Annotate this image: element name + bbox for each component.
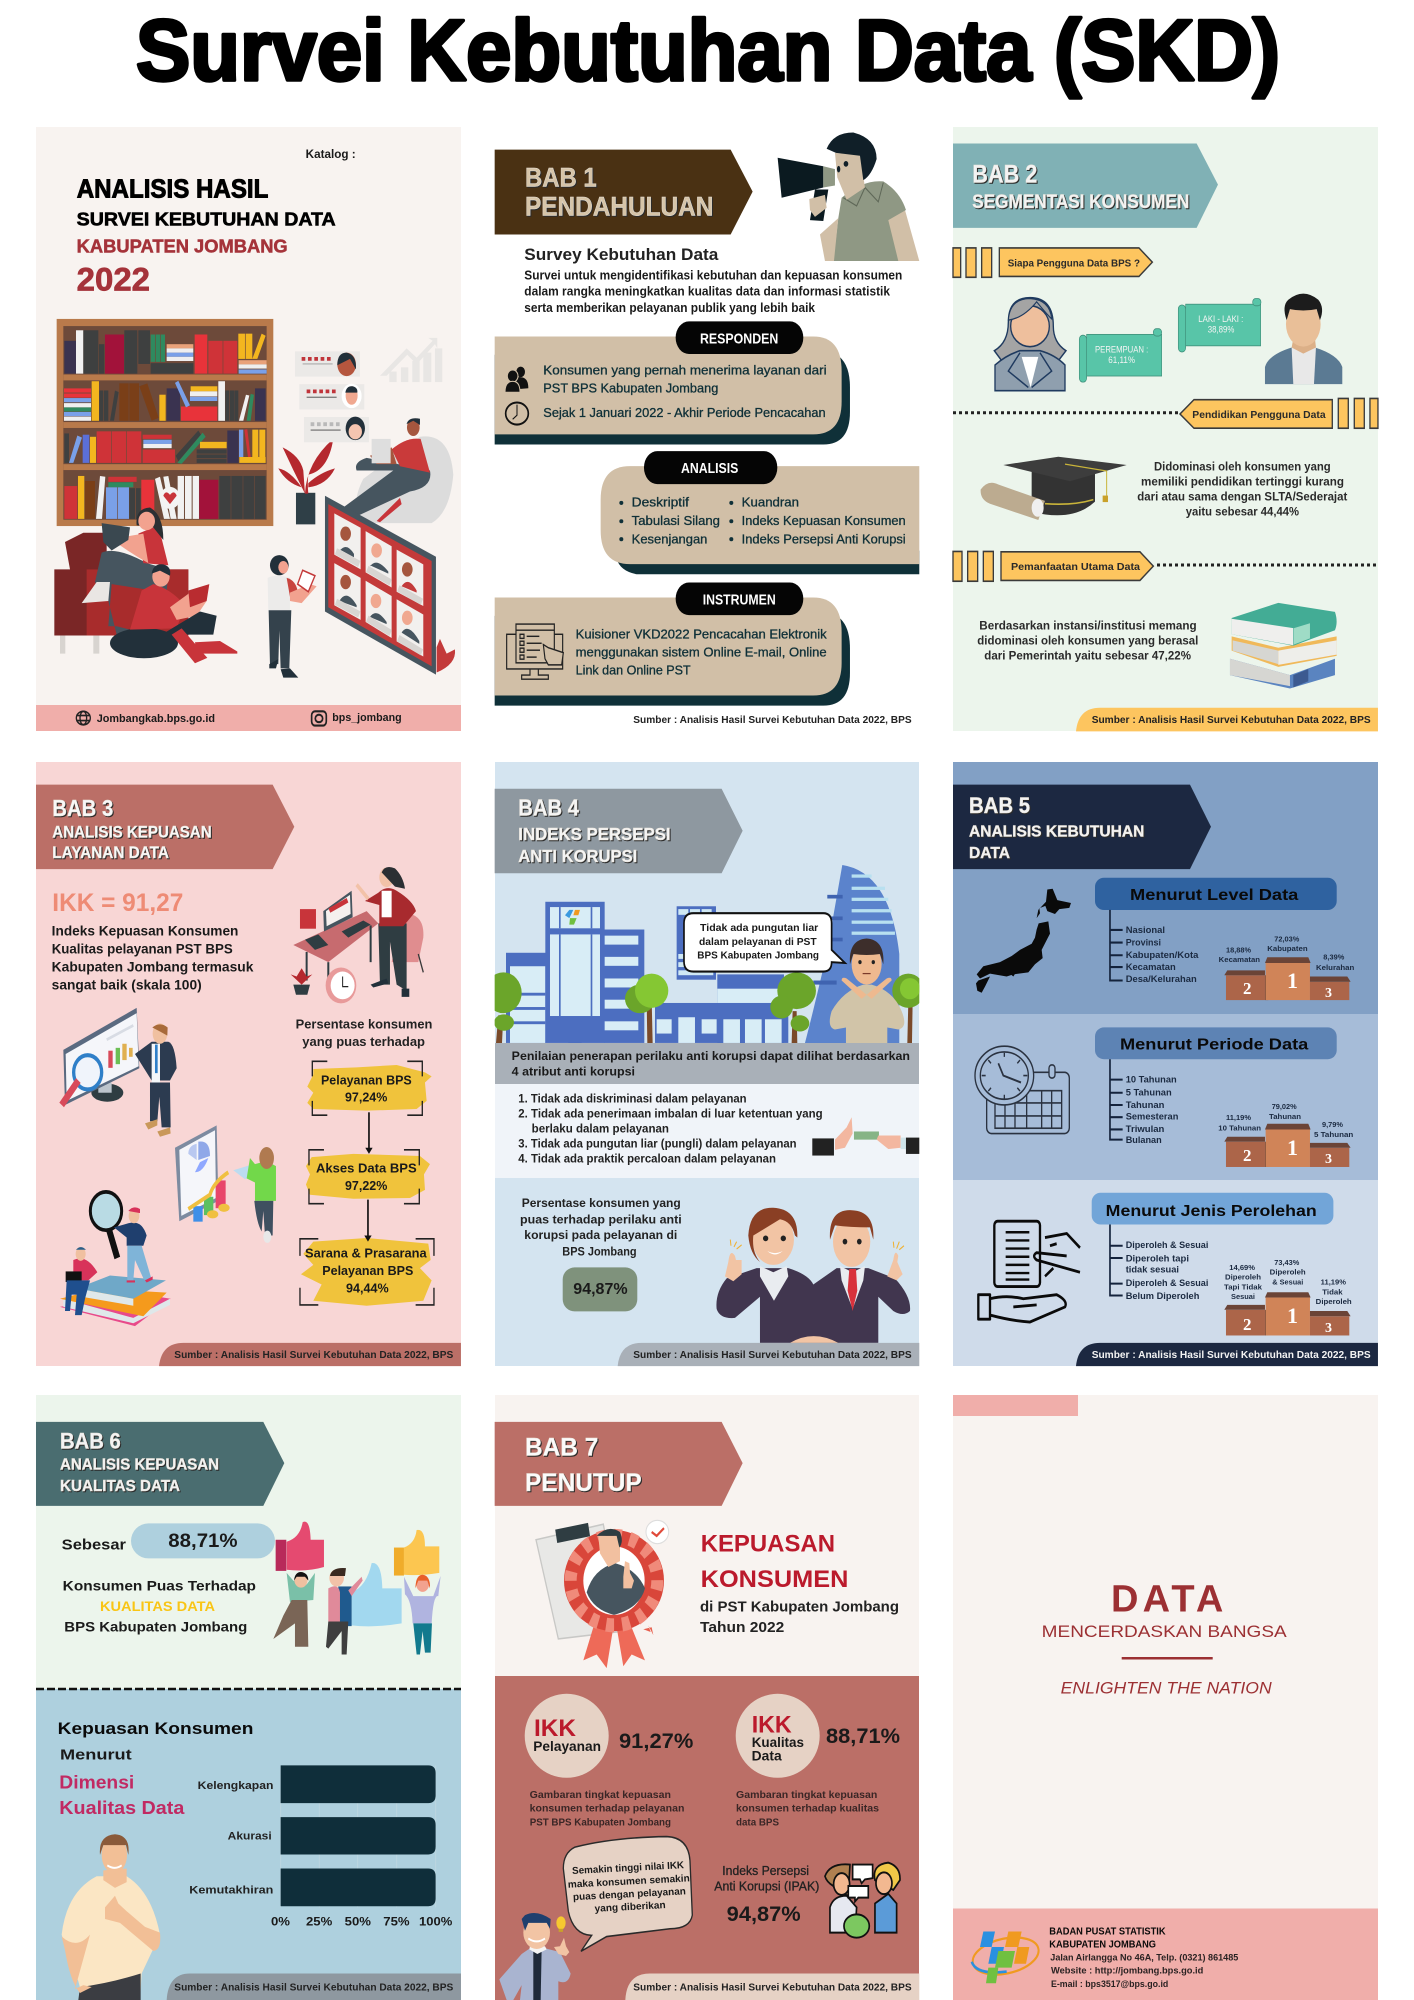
- footer text: instagram: bps_jombang: [332, 712, 402, 724]
- footer band: contact: [953, 1908, 1378, 2000]
- chart: kepuasan by data quality dimension: 75%: [383, 1916, 410, 1928]
- chart: periode data podium: 10 Tahunan: [1218, 1123, 1261, 1132]
- chart: jenis perolehan podium: Diperoleh: [1316, 1297, 1352, 1306]
- step: sarana dan prasarana: 94,44%: [346, 1282, 389, 1296]
- band: anti corruption attributes: 1. Tidak ada diskriminasi dalam pelayanan: [518, 1094, 747, 1106]
- stat: IPAK: [714, 1864, 819, 1926]
- step: sarana dan prasarana: [305, 1247, 428, 1296]
- heading: kepuasan konsumen: [58, 1719, 253, 1818]
- illustration: people holding thumbs up: [273, 1522, 441, 1655]
- banner: BAB 5: [953, 785, 1211, 869]
- section: menurut level data: Nasional: [1126, 925, 1165, 936]
- heading: kepuasan konsumen: KEPUASAN: [701, 1530, 835, 1557]
- section: menurut level data: Kabupaten/Kota: [1126, 950, 1199, 961]
- section: menurut level data: Desa/Kelurahan: [1126, 974, 1197, 985]
- banner: BAB 7: PENUTUP: [525, 1469, 642, 1497]
- chart: jenis perolehan podium: 11,19%: [1321, 1278, 1346, 1286]
- icon: BPS logo: [970, 1931, 1041, 1983]
- card: analisis: ANALISIS: [681, 460, 738, 477]
- callout: perempuan share: 61,11%: [1108, 355, 1135, 365]
- chart: level data podium: [1219, 934, 1355, 1001]
- text: pendidikan finding: [1137, 461, 1347, 519]
- banner: BAB 2: SEGMENTASI KONSUMEN: [972, 192, 1189, 213]
- callout: speech bubble: Tidak ada pungutan liar: [700, 923, 818, 934]
- card: instrumen: menggunakan sistem Online E-mail, Online: [576, 645, 827, 659]
- text: pemanfaatan finding: Berdasarkan instansi/institusi memang: [979, 620, 1197, 632]
- chart: periode data podium: 9,79%: [1322, 1120, 1343, 1129]
- text: contact details: KABUPATEN JOMBANG: [1049, 1939, 1156, 1950]
- callout: perempuan share: PEREMPUAN :: [1095, 344, 1148, 354]
- panel: BAB 1 pendahuluan: [495, 132, 919, 726]
- chart: jenis perolehan podium: 3: [1325, 1321, 1332, 1336]
- icon: globe: [76, 711, 90, 725]
- chart: level data podium: 3: [1325, 986, 1332, 1001]
- heading: cover title: KABUPATEN JOMBANG: [77, 236, 288, 256]
- illustration: growth chart icon: [380, 338, 442, 382]
- chart: periode data podium: 11,19%: [1226, 1113, 1251, 1122]
- chart: kepuasan by data quality dimension: 0%: [271, 1916, 290, 1928]
- card: responden: Sejak 1 Januari 2022 - Akhir Periode Pencacahan: [543, 406, 826, 420]
- section: menurut level data: Kecamatan: [1126, 962, 1176, 973]
- stat: 88,71%: [62, 1523, 275, 1558]
- chart: level data podium: 72,03%: [1274, 934, 1300, 943]
- text: survey description: Survey Kebutuhan Data: [524, 245, 719, 264]
- text: konsumen puas: Konsumen Puas Terhadap: [63, 1577, 256, 1593]
- stat: 94,87% pill: 94,87%: [573, 1281, 628, 1298]
- step: pelayanan BPS: Pelayanan BPS: [321, 1074, 412, 1088]
- panel: closing: [953, 1395, 1378, 2000]
- text: pelayanan description: konsumen terhadap pelayanan: [530, 1803, 684, 1815]
- source note: [167, 1974, 461, 2000]
- step: pelayanan BPS: 97,24%: [345, 1091, 387, 1105]
- source note: [1076, 708, 1378, 731]
- chart: level data podium: Kecamatan: [1219, 955, 1260, 964]
- illustration: magnifier and books: [60, 1192, 171, 1326]
- section: menurut periode data: Tahunan: [1126, 1100, 1165, 1111]
- text: persentase heading: Persentase konsumen: [296, 1018, 432, 1032]
- banner: BAB 7: [495, 1422, 743, 1506]
- illustration: trees: [485, 972, 924, 1045]
- tag: pemanfaatan utama: [953, 551, 1378, 581]
- callout: laki-laki share: [1178, 298, 1261, 352]
- heading: data mencerdaskan bangsa: DATA: [1111, 1579, 1223, 1621]
- card: instrumen: Kuisioner VKD2022 Pencacahan Elektronik: [576, 627, 827, 641]
- stat: IKK kualitas data: IKK: [752, 1711, 792, 1738]
- panel: BAB 6 analisis kepuasan kualitas: [36, 1395, 461, 2000]
- banner: BAB 5: BAB 5: [969, 793, 1030, 818]
- text: IKK explanation: sangat baik (skala 100): [52, 978, 202, 992]
- text: pendidikan finding: Didominasi oleh konsumen yang: [1154, 461, 1331, 473]
- section: menurut jenis perolehan: Diperoleh tapi: [1126, 1254, 1189, 1265]
- text: contact details: [1049, 1927, 1239, 1990]
- chart: kepuasan by data quality dimension: 50%: [345, 1916, 371, 1928]
- section: menurut jenis perolehan: [1092, 1193, 1333, 1302]
- chart: jenis perolehan podium: Diperoleh: [1225, 1273, 1261, 1282]
- text: pendidikan finding: memiliki pendidikan tertinggi kurang: [1141, 476, 1344, 488]
- heading: data mencerdaskan bangsa: [1042, 1579, 1287, 1697]
- tag: pendidikan pengguna: [953, 398, 1378, 428]
- illustration: man thumbs up: [62, 1834, 160, 2000]
- tag: siapa pengguna: [953, 248, 1152, 277]
- source note: Sumber : Analisis Hasil Survei Kebutuhan Data 2022, BPS: [633, 1982, 912, 1994]
- card: analisis: Kesenjangan: [632, 532, 707, 546]
- text: kualitas description: [736, 1789, 879, 1828]
- text: kualitas description: Gambaran tingkat kepuasan: [736, 1789, 877, 1801]
- flow shapes: [300, 1061, 434, 1306]
- chart: kepuasan by data quality dimension: Kemutakhiran: [189, 1884, 274, 1896]
- banner: BAB 5: DATA: [969, 845, 1010, 862]
- banner: BAB 2: [953, 143, 1218, 228]
- chart: level data podium: 18,88%: [1226, 945, 1251, 954]
- callout: speech bubble: Semakin tinggi nilai IKK: [572, 1860, 685, 1877]
- banner: BAB 3: [36, 785, 294, 869]
- band: anti corruption attributes: 4. Tidak ada praktik percaloan dalam pelayanan: [518, 1154, 776, 1166]
- chart: jenis perolehan podium: Tapi Tidak: [1224, 1282, 1263, 1291]
- card: analisis: Deskriptif: [632, 496, 690, 510]
- icon: map silhouette: [976, 889, 1071, 993]
- source note: Sumber : Analisis Hasil Survei Kebutuhan Data 2022, BPS: [1092, 1349, 1371, 1361]
- text: pendidikan finding: dari atau sama dengan SLTA/Sederajat: [1137, 492, 1347, 504]
- text: pendidikan finding: yaitu sebesar 44,44%: [1186, 507, 1299, 519]
- text: contact details: E-mail : bps3517@bps.go.id: [1051, 1979, 1168, 1990]
- panel: BAB 5 analisis kebutuhan data: [953, 762, 1378, 1366]
- icon: two men exchanging money: [825, 1863, 900, 1938]
- chart: jenis perolehan podium: 73,43%: [1274, 1258, 1300, 1267]
- section: menurut jenis perolehan: Menurut Jenis Perolehan: [1106, 1203, 1317, 1220]
- chart: level data podium: Kelurahan: [1316, 963, 1355, 972]
- footer text: website: Jombangkab.bps.go.id: [97, 713, 215, 725]
- text: survey description: [524, 245, 902, 315]
- chart: kepuasan by data quality dimension: [189, 1765, 452, 1928]
- heading: kepuasan konsumen: Kualitas Data: [59, 1798, 185, 1818]
- text: pemanfaatan finding: dari Pemerintah yaitu sebesar 47,22%: [984, 651, 1191, 663]
- heading: cover title: 2022: [77, 262, 150, 298]
- callout: perempuan share: [1079, 329, 1162, 382]
- callout: speech bubble: BPS Kabupaten Jombang: [697, 950, 819, 962]
- illustration: city buildings with BPS office: [506, 865, 899, 1044]
- heading: kepuasan konsumen: Dimensi: [59, 1773, 134, 1793]
- panel: BAB 3 analisis kepuasan layanan: [36, 762, 461, 1366]
- text: survey description: serta memberikan pelayanan publik yang lebih baik: [524, 301, 815, 315]
- text: survey description: Survei untuk mengidentifikasi kebutuhan dan kepuasan konsumen: [524, 268, 902, 282]
- banner: BAB 7: BAB 7: [525, 1433, 598, 1461]
- band: assessment intro: [495, 1043, 919, 1084]
- band: assessment intro: Penilaian penerapan perilaku anti korupsi dapat dilihat berdasarkan: [512, 1049, 910, 1063]
- panel: BAB 7 penutup: [495, 1395, 919, 2000]
- chart: periode data podium: 2: [1243, 1146, 1252, 1165]
- source note: Sumber : Analisis Hasil Survei Kebutuhan Data 2022, BPS: [1092, 714, 1371, 726]
- text: contact details: BADAN PUSAT STATISTIK: [1049, 1927, 1166, 1938]
- card: analisis: Kuandran: [742, 496, 799, 510]
- text: percentage anti corruption: korupsi pada pelayanan di: [524, 1228, 677, 1242]
- text: percentage anti corruption: puas terhadap perilaku anti: [520, 1212, 682, 1226]
- text: kualitas description: konsumen terhadap kualitas: [736, 1803, 879, 1815]
- card: analisis: Indeks Kepuasan Konsumen: [742, 514, 906, 528]
- chart: kepuasan by data quality dimension: 25%: [306, 1916, 332, 1928]
- chart: jenis perolehan podium: Diperoleh: [1270, 1268, 1306, 1277]
- illustration: person on beanbag with board: [325, 418, 455, 675]
- panel: BAB 2 segmentasi konsumen: [953, 127, 1378, 731]
- illustration: two business people thumbs up: [716, 1208, 910, 1343]
- card: responden: [495, 321, 850, 445]
- heading: cover title: [77, 174, 336, 298]
- chart: jenis perolehan podium: 14,69%: [1229, 1263, 1255, 1272]
- chart: level data podium: 8,39%: [1323, 953, 1345, 962]
- stat: IKK pelayanan: IKK: [534, 1715, 577, 1742]
- text: IKK explanation: Kabupaten Jombang termasuk: [52, 960, 254, 974]
- illustration: readers on sofa: [54, 508, 237, 663]
- illustration: man with idea: [499, 1913, 571, 2000]
- source note: Sumber : Analisis Hasil Survei Kebutuhan Data 2022, BPS: [174, 1982, 453, 1994]
- illustration: graduation cap and diploma: [981, 457, 1127, 520]
- text: pelayanan description: [530, 1789, 684, 1828]
- panel: BAB 4 indeks persepsi anti korupsi: [485, 762, 924, 1366]
- heading: kepuasan konsumen: [700, 1530, 899, 1636]
- illustration: stack of books: [1230, 603, 1337, 689]
- source note: Sumber : Analisis Hasil Survei Kebutuhan Data 2022, BPS: [633, 1349, 912, 1361]
- banner: BAB 2: BAB 2: [972, 161, 1037, 189]
- icon: document and hands: [978, 1221, 1080, 1322]
- source note: [1076, 1343, 1378, 1366]
- step: akses data BPS: 97,22%: [345, 1179, 387, 1193]
- chart: jenis perolehan podium: [1224, 1258, 1352, 1336]
- section: menurut periode data: Triwulan: [1126, 1124, 1165, 1135]
- text: konsumen puas: [63, 1577, 256, 1635]
- illustration: man icon: [1265, 294, 1342, 384]
- step: akses data BPS: Akses Data BPS: [316, 1161, 417, 1176]
- source note: [618, 1343, 919, 1366]
- icon: clock and calendar: [975, 1046, 1069, 1134]
- panel: cover: [36, 127, 461, 731]
- banner: BAB 6: ANALISIS KEPUASAN: [60, 1457, 219, 1474]
- step: pelayanan BPS: [321, 1074, 412, 1105]
- stat: 88,71%: 88,71%: [168, 1531, 238, 1552]
- text: catalog label: Katalog :: [306, 149, 356, 161]
- chart: jenis perolehan podium: 1: [1287, 1303, 1298, 1328]
- step: akses data BPS: [316, 1161, 417, 1193]
- source note: [625, 1974, 919, 2000]
- stat: IKK pelayanan: [525, 1694, 694, 1778]
- source note: Sumber : Analisis Hasil Survei Kebutuhan Data 2022, BPS: [174, 1349, 453, 1361]
- illustration: woman icon: [994, 298, 1066, 391]
- heading: data mencerdaskan bangsa: MENCERDASKAN BANGSA: [1042, 1622, 1287, 1641]
- banner: BAB 4: ANTI KORUPSI: [518, 846, 637, 866]
- stat: IKK kualitas data: Kualitas: [752, 1735, 804, 1750]
- step: sarana dan prasarana: Sarana & Prasarana: [305, 1247, 428, 1261]
- banner: BAB 3: ANALISIS KEPUASAN: [52, 824, 212, 842]
- illustration: man crossing arms: [830, 938, 904, 1045]
- tag: siapa pengguna: Siapa Pengguna Data BPS ?: [1008, 257, 1140, 269]
- chart: kepuasan by data quality dimension: Kelengkapan: [198, 1780, 274, 1792]
- text: IKK explanation: Indeks Kepuasan Konsumen: [52, 924, 238, 939]
- callout: speech bubble: dalam pelayanan di PST: [699, 937, 817, 948]
- banner: BAB 1: BAB 1: [525, 163, 597, 193]
- callout: speech bubble: [684, 913, 845, 972]
- banner: BAB 6: KUALITAS DATA: [60, 1478, 180, 1495]
- chart: level data podium: Kabupaten: [1267, 944, 1308, 953]
- callout: speech bubble: yang diberikan: [594, 1900, 666, 1915]
- text: contact details: Jalan Airlangga No 46A, Telp. (0321) 861485: [1050, 1952, 1239, 1963]
- illustration: plant: [278, 439, 335, 524]
- chart: level data podium: 1: [1287, 968, 1298, 993]
- illustration: woman at desk: [291, 867, 423, 1003]
- card: analisis: Tabulasi Silang: [632, 514, 720, 528]
- text: kualitas description: data BPS: [736, 1816, 779, 1828]
- text: pemanfaatan finding: [977, 620, 1198, 663]
- text: pelayanan description: Gambaran tingkat kepuasan: [530, 1789, 671, 1801]
- callout: speech bubble: puas dengan pelayanan: [573, 1886, 686, 1903]
- section: menurut periode data: Menurut Periode Data: [1120, 1036, 1308, 1054]
- text: pemanfaatan finding: didominasi oleh konsumen yang berasal: [977, 636, 1198, 648]
- card: instrumen: Link dan Online PST: [576, 663, 691, 677]
- section: menurut periode data: Bulanan: [1126, 1135, 1162, 1146]
- callout: laki-laki share: 38,89%: [1208, 324, 1234, 334]
- band: anti corruption attributes: [495, 1084, 919, 1178]
- text: pelayanan description: PST BPS Kabupaten Jombang: [530, 1816, 671, 1828]
- card: instrumen: INSTRUMEN: [703, 592, 776, 608]
- heading: kepuasan konsumen: KONSUMEN: [701, 1566, 848, 1593]
- text: percentage anti corruption: BPS Jombang: [562, 1244, 637, 1258]
- card: analisis: [601, 451, 919, 574]
- text: konsumen puas: KUALITAS DATA: [100, 1598, 215, 1614]
- chart: periode data podium: [1218, 1102, 1354, 1167]
- section: menurut level data: Provinsi: [1126, 937, 1161, 948]
- stat: IKK pelayanan: Pelayanan: [533, 1739, 601, 1754]
- stat: IKK kualitas data: [736, 1694, 900, 1778]
- banner: BAB 4: INDEKS PERSEPSI: [518, 824, 671, 844]
- banner: BAB 3: LAYANAN DATA: [52, 844, 169, 862]
- card: responden: PST BPS Kabupaten Jombang: [543, 382, 718, 396]
- illustration: standing man with clipboard: [268, 555, 317, 678]
- heading: kepuasan konsumen: Menurut: [60, 1747, 132, 1764]
- illustration: refusing money: [812, 1117, 919, 1156]
- banner: BAB 4: [495, 789, 743, 873]
- icon: instagram: [312, 711, 326, 726]
- chart: kepuasan by data quality dimension: Akurasi: [228, 1830, 272, 1842]
- stat: IPAK: 94,87%: [727, 1903, 801, 1926]
- text: percentage anti corruption: [520, 1196, 682, 1258]
- chart: periode data podium: 79,02%: [1272, 1102, 1297, 1111]
- stat: 94,87% pill: [563, 1267, 637, 1311]
- band: anti corruption attributes: 2. Tidak ada penerimaan imbalan di luar ketentuan yang: [518, 1109, 823, 1121]
- chart: jenis perolehan podium: 2: [1243, 1315, 1252, 1334]
- heading: kepuasan konsumen: Tahun 2022: [700, 1619, 784, 1636]
- chart: jenis perolehan podium: Tidak: [1322, 1287, 1343, 1296]
- flow: satisfaction steps: [300, 1061, 434, 1306]
- banner: BAB 5: ANALISIS KEBUTUHAN: [969, 824, 1144, 840]
- chart: periode data podium: 1: [1287, 1135, 1298, 1160]
- band: assessment intro: 4 atribut anti korupsi: [512, 1065, 635, 1079]
- heading: kepuasan konsumen: di PST Kabupaten Jombang: [700, 1599, 899, 1616]
- banner: BAB 6: [36, 1422, 284, 1506]
- banner: BAB 1: PENDAHULUAN: [525, 191, 713, 221]
- chart: periode data podium: 5 Tahunan: [1314, 1130, 1354, 1139]
- illustration: rosette with man: [536, 1520, 669, 1668]
- illustration: tablet with chart: [175, 1125, 276, 1243]
- text: IKK explanation: [52, 924, 254, 992]
- section: menurut jenis perolehan: Belum Diperoleh: [1126, 1291, 1200, 1302]
- illustration: rating cards: [295, 351, 369, 442]
- section: menurut jenis perolehan: tidak sesuai: [1126, 1265, 1179, 1276]
- chart: jenis perolehan podium: Sesuai: [1231, 1292, 1255, 1301]
- text: persentase heading: yang puas terhadap: [302, 1035, 425, 1049]
- section: menurut periode data: 5 Tahunan: [1126, 1088, 1172, 1099]
- band: anti corruption attributes: 3. Tidak ada pungutan liar (pungli) dalam pelayanan: [518, 1138, 797, 1150]
- text: contact details: Website : http://jombang.bps.go.id: [1051, 1966, 1203, 1976]
- stat: IKK pelayanan: 91,27%: [619, 1730, 694, 1753]
- section: menurut jenis perolehan: Diperoleh & Sesuai: [1126, 1278, 1208, 1289]
- stat: IPAK: Indeks Persepsi: [722, 1864, 809, 1878]
- text: percentage anti corruption: Persentase konsumen yang: [522, 1196, 681, 1210]
- text: IKK explanation: Kualitas pelayanan PST BPS: [52, 942, 233, 957]
- text: konsumen puas: BPS Kabupaten Jombang: [64, 1619, 247, 1635]
- card: responden: RESPONDEN: [700, 330, 778, 347]
- stat: IKK kualitas data: Data: [752, 1748, 782, 1763]
- section: menurut level data: [1095, 878, 1337, 985]
- banner: BAB 6: BAB 6: [60, 1428, 121, 1453]
- heading: cover title: SURVEI KEBUTUHAN DATA: [77, 208, 336, 230]
- callout: speech bubble: [563, 1837, 692, 1951]
- illustration: bookshelf: [57, 319, 273, 526]
- source note: Sumber : Analisis Hasil Survei Kebutuhan Data 2022, BPS: [633, 714, 912, 726]
- banner: BAB 3: BAB 3: [52, 795, 113, 821]
- callout: laki-laki share: LAKI - LAKI :: [1198, 314, 1243, 324]
- chart: jenis perolehan podium: & Sesuai: [1272, 1278, 1303, 1286]
- chart: periode data podium: 3: [1325, 1152, 1332, 1167]
- heading: kepuasan konsumen: Kepuasan Konsumen: [58, 1719, 253, 1738]
- stat: 88,71%: Sebesar: [62, 1536, 126, 1554]
- source note: [159, 1343, 461, 1366]
- heading: cover title: ANALISIS HASIL: [77, 174, 268, 204]
- callout: speech bubble: maka konsumen semakin: [568, 1873, 690, 1891]
- tag: pemanfaatan utama: Pemanfaatan Utama Data: [1011, 561, 1140, 573]
- banner: BAB 1: [495, 150, 753, 234]
- text: survey description: dalam rangka meningkatkan kualitas data dan informasi statistik: [524, 285, 890, 299]
- banner: BAB 4: BAB 4: [518, 794, 579, 820]
- card: responden: Konsumen yang pernah menerima layanan dari: [543, 363, 827, 377]
- stat: IKK 91,27: IKK = 91,27: [52, 889, 183, 917]
- illustration: analyst at monitor: [62, 1008, 177, 1137]
- card: instrumen: [495, 582, 850, 706]
- stat: IKK kualitas data: 88,71%: [826, 1725, 900, 1748]
- section: menurut periode data: [1095, 1027, 1337, 1146]
- section: menurut periode data: Semesteran: [1126, 1112, 1179, 1123]
- chart: level data podium: 2: [1243, 979, 1252, 998]
- illustration: man with megaphone: [778, 132, 919, 261]
- title: Survei Kebutuhan Data (SKD): [136, 3, 1280, 99]
- section: menurut periode data: 10 Tahunan: [1126, 1074, 1177, 1086]
- card: analisis: Indeks Persepsi Anti Korupsi: [742, 532, 906, 546]
- band: anti corruption attributes: berlaku dalam pelayanan: [532, 1123, 669, 1135]
- section: menurut level data: Menurut Level Data: [1130, 887, 1298, 904]
- section: menurut jenis perolehan: Diperoleh & Sesuai: [1126, 1240, 1208, 1251]
- tag: pendidikan pengguna: Pendidikan Pengguna Data: [1192, 409, 1326, 421]
- heading: data mencerdaskan bangsa: ENLIGHTEN THE NATION: [1061, 1678, 1272, 1697]
- text: persentase heading: [296, 1018, 432, 1049]
- stat: IPAK: Anti Korupsi (IPAK): [714, 1880, 819, 1894]
- chart: periode data podium: Tahunan: [1269, 1112, 1301, 1121]
- step: sarana dan prasarana: Pelayanan BPS: [322, 1264, 413, 1278]
- chart: kepuasan by data quality dimension: 100%: [419, 1916, 452, 1928]
